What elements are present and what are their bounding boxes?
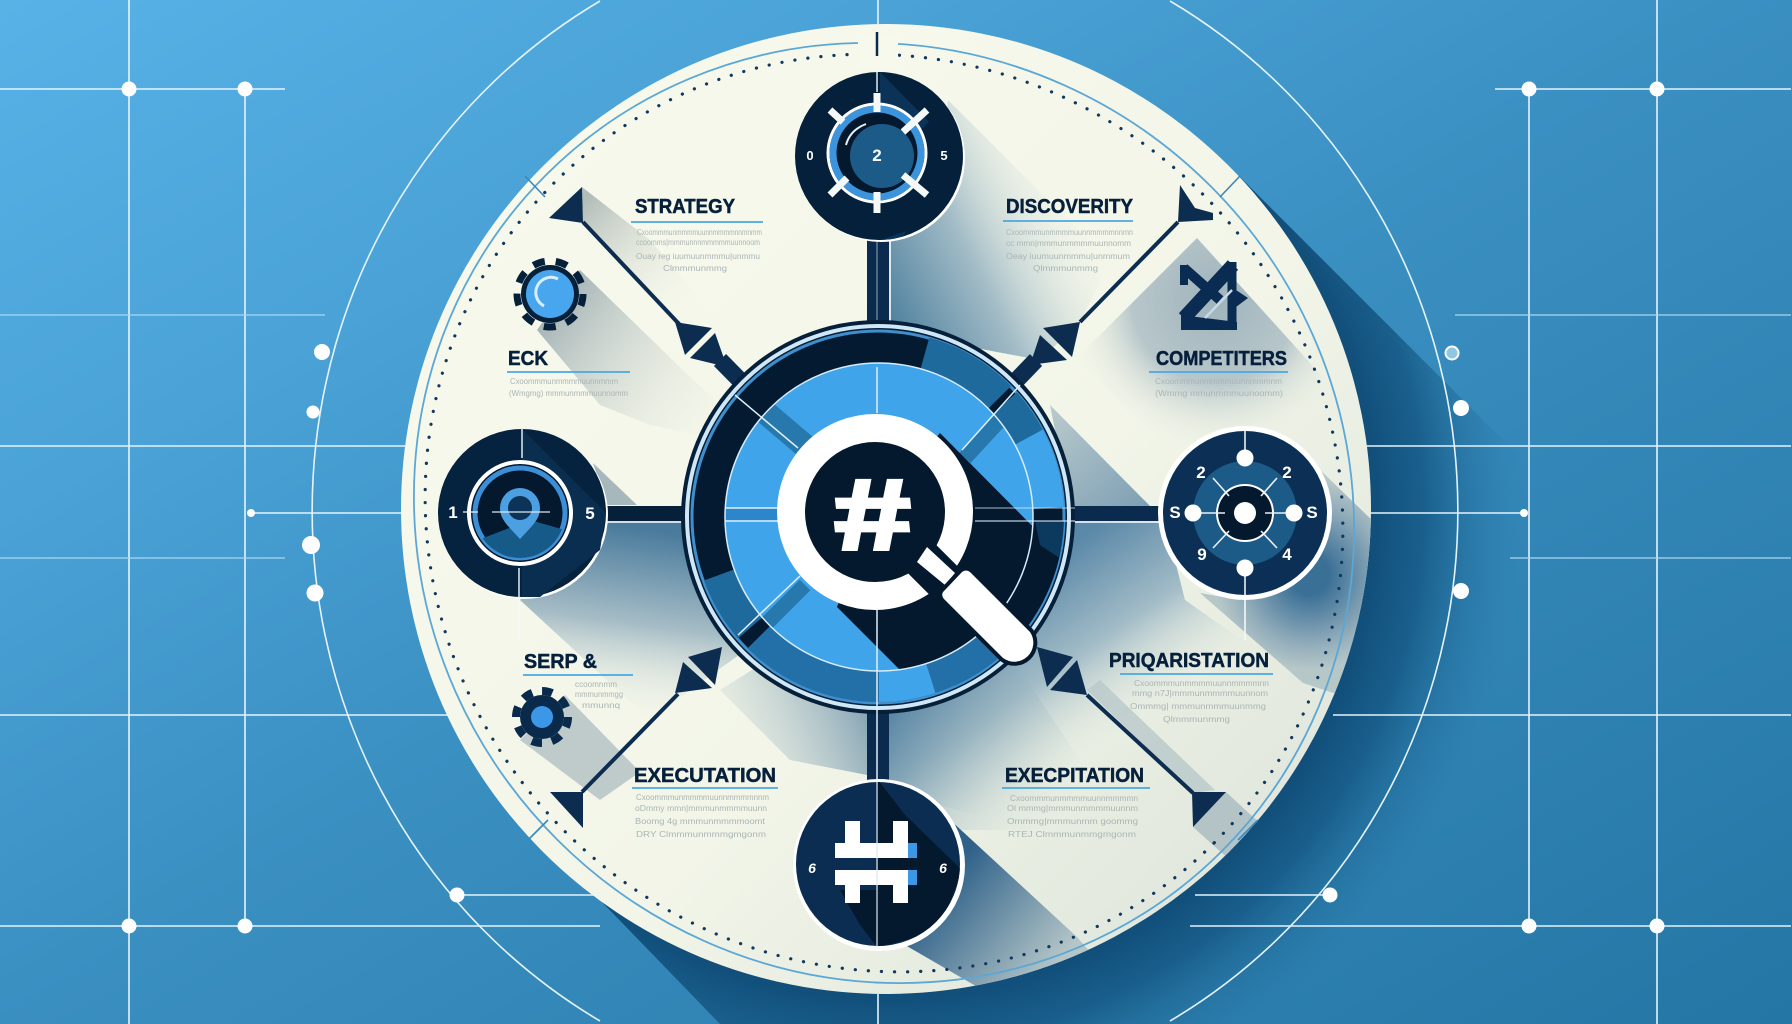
block: execution left: Cxoommmunmmmmuunnmmmmnnm xyxy=(636,793,769,802)
block: discovery: Oeay iuumuunmmmu|unmmum xyxy=(1006,252,1130,261)
node: right radial dial: S xyxy=(1306,503,1318,522)
block: execution right: RTEJ Clmmmunmmgmgonm xyxy=(1008,830,1136,839)
block: strategy: Cxoommmunmmmmuunnmmmmnnmnmm xyxy=(637,228,762,237)
node: right radial dial xyxy=(1158,426,1332,600)
block: serp: ccoomnmm xyxy=(575,680,617,689)
node: top gauge: 2 xyxy=(872,146,882,165)
dial spokes xyxy=(1193,431,1297,595)
node: bottom hash: 6 xyxy=(808,860,816,876)
block: eck: (Wmgmg) mmmunmmmuunnomm xyxy=(509,389,628,398)
node drop lines xyxy=(519,598,1245,640)
block: prioritisation: Cxoommmunmmmmuunnmmmmnn xyxy=(1134,679,1269,688)
block: strategy: ccoomms|mmmunnnmmmmmuunnoom xyxy=(636,238,760,247)
hub bottom ring sectors xyxy=(759,637,1000,687)
node: top gauge: 0 xyxy=(806,148,814,163)
block: prioritisation: mmg n7J|mmmunmmmmuunnom xyxy=(1132,689,1268,698)
arrow: top right xyxy=(982,185,1213,416)
arrow: bottom right xyxy=(1037,647,1226,827)
icon: map pin xyxy=(500,488,540,539)
block: eck: ECK xyxy=(508,348,549,370)
block: strategy: Clmmmunmmg xyxy=(663,264,727,273)
arrow: top left xyxy=(549,187,775,416)
block: execution right: Ol mmmg|mmmunmmmmuunnm xyxy=(1007,804,1138,813)
block: serp xyxy=(523,651,633,710)
gauge tick marks xyxy=(830,93,927,213)
icon: small gear xyxy=(516,691,568,743)
icon: gear with blue lens xyxy=(517,261,583,327)
block: execution left: Boomg 4g mmmunmmmmoomt xyxy=(635,817,766,826)
icon: crossed competitors mark xyxy=(1181,262,1248,330)
magnifier shadow xyxy=(837,433,1064,686)
block: execution right: Ommmg|mmmunmm goommg xyxy=(1007,817,1138,826)
hub inner blue disc xyxy=(725,363,1033,671)
block: execution left: EXECUTATION xyxy=(634,765,776,787)
connector: horizontal left xyxy=(595,506,725,522)
block: prioritisation xyxy=(1109,650,1273,724)
node: right radial dial: 9 xyxy=(1197,545,1207,564)
block: discovery: Qlmmmunmmg xyxy=(1033,264,1098,273)
icon: magnifying glass with hash xyxy=(791,428,1033,662)
arrow: bottom left xyxy=(550,647,722,828)
block: competiters: Cxoommmunmmmmuunnmmmnm xyxy=(1155,377,1282,386)
block: competiters: COMPETITERS xyxy=(1156,348,1287,370)
node: left location target: 1 xyxy=(448,503,458,522)
block: execution right xyxy=(1002,765,1150,839)
node: right radial dial: 4 xyxy=(1282,545,1292,564)
block: discovery xyxy=(1003,196,1134,273)
block: discovery: Cxoommmunmmmmuunnmmmmnnmn xyxy=(1006,228,1133,237)
node: right radial dial: S xyxy=(1169,503,1181,522)
block: strategy xyxy=(631,196,763,273)
node: right radial dial: 2 xyxy=(1196,463,1206,482)
block: discovery: cc mmn|mmmunmmmmuunnomm xyxy=(1006,239,1131,248)
node: right radial dial: 2 xyxy=(1282,463,1292,482)
block: execution left xyxy=(632,765,778,839)
block: execution right: EXECPITATION xyxy=(1005,765,1144,787)
block: discovery: DISCOVERITY xyxy=(1006,196,1134,218)
block: execution left: DRY Clmmmunmmmgmgonm xyxy=(636,830,766,839)
hub crosshair lines xyxy=(725,367,1075,790)
icon: hash bars xyxy=(835,821,917,903)
long shadows on panel xyxy=(520,100,1385,1000)
node: left location target: 5 xyxy=(585,504,595,523)
main circular panel xyxy=(401,24,1385,1000)
block: execution left: oDmmy mmn|mmmunmmmmuunn xyxy=(635,804,767,813)
node: top gauge: 5 xyxy=(940,148,948,163)
block: prioritisation: Qlmmmunmmg xyxy=(1163,715,1230,724)
connector: vertical bottom xyxy=(867,692,889,790)
block: competiters: (Wmmg mmunmmmuunoomm) xyxy=(1155,389,1283,398)
hub ring coloured sectors xyxy=(719,353,1049,628)
large circle drop shadow xyxy=(597,177,1792,1024)
connector: horizontal right xyxy=(1033,506,1163,522)
block: prioritisation: PRIQARISTATION xyxy=(1109,650,1269,672)
central hub xyxy=(681,320,1075,780)
block: serp: mmmunmmgg xyxy=(575,690,623,699)
icon: magnifying glass with hash: # xyxy=(828,459,917,570)
block: serp: mmunnq xyxy=(582,701,620,710)
block: prioritisation: Ommmg| mmmunmmmuunmmg xyxy=(1130,702,1266,711)
block: eck xyxy=(507,348,630,398)
block: strategy: Ouay reg iuumuunmmmu|unmmu xyxy=(636,252,760,261)
node: bottom hash xyxy=(793,779,965,951)
block: strategy: STRATEGY xyxy=(635,196,736,218)
node: top gauge xyxy=(795,72,965,242)
block: execution right: Cxoommmunmmmmuunnmmmmn xyxy=(1010,794,1138,803)
block: competiters xyxy=(1149,348,1288,398)
block: serp: SERP & xyxy=(524,651,597,673)
node: bottom hash: 6 xyxy=(939,860,947,876)
node: left location target xyxy=(438,428,608,599)
connector: vertical top xyxy=(867,225,890,335)
block: eck: Cxoommmunmmmmuunnmmm xyxy=(510,377,618,386)
decorative rings: thin blue and dotted xyxy=(414,32,1354,983)
